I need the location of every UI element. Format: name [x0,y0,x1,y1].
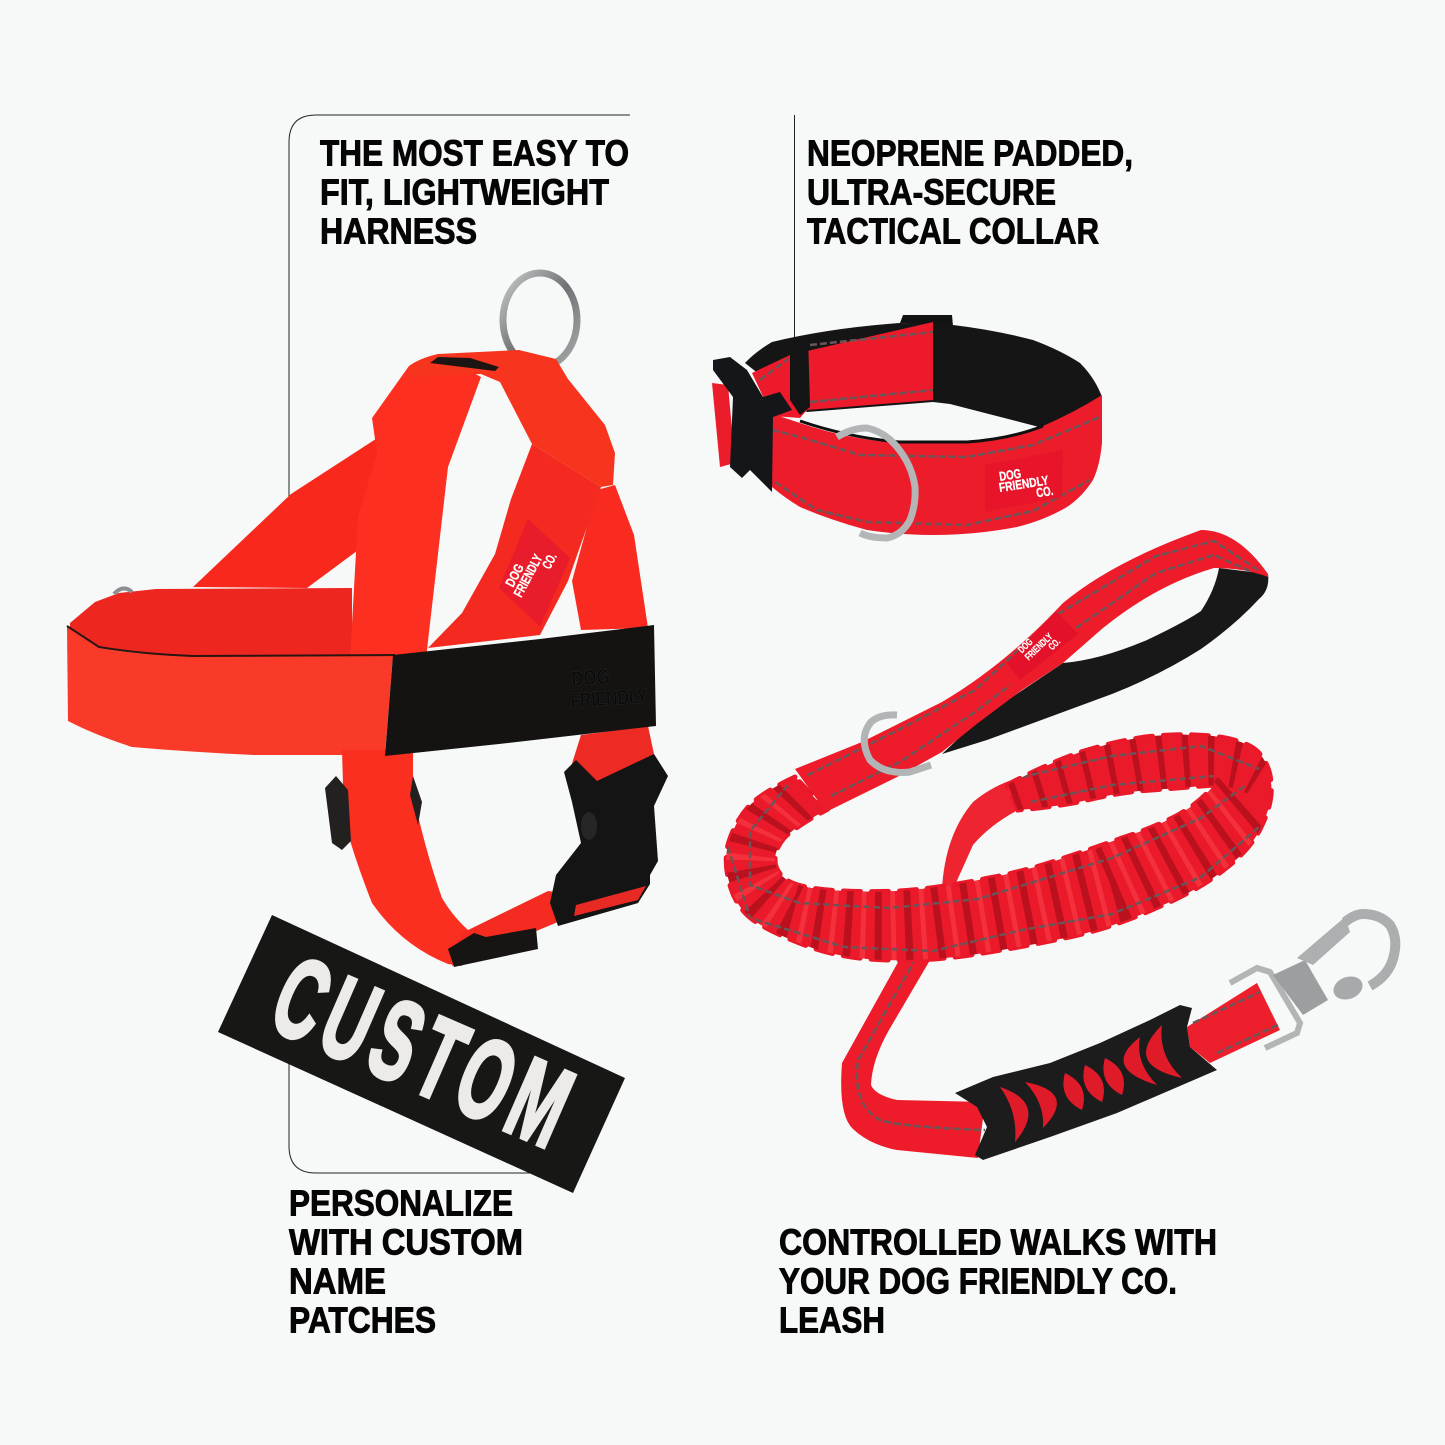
harness diagonal strap [452,878,650,966]
leash handle lining [942,568,1268,754]
collar label [985,450,1063,512]
leash swivel clip [1230,914,1395,1048]
heading: leash: YOUR DOG FRIENDLY CO. [779,1260,1177,1302]
collar buckle [713,357,792,492]
harness band inner side [70,588,352,660]
heading: collar: NEOPRENE PADDED, [807,132,1133,174]
collar D-ring [837,428,915,538]
collar black lining [745,323,1102,428]
harness left slider [325,776,422,850]
harness metal hardware [114,588,132,594]
leash D-ring [864,715,931,772]
harness yoke [409,350,615,487]
collar dark top edge [800,421,1043,442]
heading: custom patches: WITH CUSTOM [289,1222,523,1262]
collar label: DOG [998,466,1022,484]
collar black strap [790,335,810,415]
harness right front strap [428,444,601,648]
harness buckle strap slot [574,886,646,916]
leash handle [795,530,1268,812]
harness belly band [67,627,393,755]
harness panel on top [385,625,656,756]
collar stitching [772,417,1100,525]
harness left shoulder strap [193,433,385,588]
leash lower strap [841,955,985,1158]
collar label: CO. [1035,483,1054,500]
harness panel on top: DOG [571,665,610,691]
connector line: harness heading [289,115,630,500]
harness upper strap to buckle [570,726,654,783]
collar inner red side [752,322,933,418]
collar left end [712,383,735,467]
harness buckle pin [581,812,597,840]
patch text: CUSTOM [255,931,596,1175]
harness centre strap [350,354,481,660]
harness label: CO. [539,550,560,572]
heading: collar: ULTRA-SECURE [807,172,1056,212]
harness label: DOG [502,561,527,589]
harness panel on top: FRIENDLY [570,685,648,713]
bungee ribs [726,734,1272,960]
bungee scalloped edge [726,735,1271,960]
heading: leash: CONTROLLED WALKS WITH [779,1222,1217,1262]
harness label [499,519,570,627]
harness black yoke slot [430,357,499,371]
harness black buckle [550,754,668,926]
heading: custom patches: PATCHES [289,1300,436,1340]
connector line: patch heading [289,1050,530,1173]
collar [712,315,1102,538]
leash end strap [1187,983,1280,1063]
collar top keeper [900,315,953,326]
harness lower chest strap [342,750,474,966]
heading: leash [779,1222,1217,1340]
heading: collar: TACTICAL COLLAR [807,210,1099,252]
heading: harness [320,132,629,252]
leash handle label: CO. [1047,636,1063,653]
collar front band [770,395,1102,535]
heading: leash: LEASH [779,1300,885,1340]
heading: harness: THE MOST EASY TO [320,132,629,174]
heading: custom patches [289,1182,523,1340]
connector line: collar heading [794,115,796,345]
harness bottom slider [448,928,538,967]
leash handle label: FRIENDLY [1023,631,1055,663]
collar inner stitching [760,332,933,402]
leash grip cut-outs [1000,1025,1182,1142]
leash lower stitching [857,958,985,1130]
heading: harness: FIT, LIGHTWEIGHT [320,172,609,212]
harness [67,273,668,967]
heading: custom patches: NAME [289,1260,386,1302]
leash end stitching [1193,992,1278,1053]
leash bungee section [724,732,1274,962]
collar label: FRIENDLY [998,472,1050,495]
heading: custom patches: PERSONALIZE [289,1182,513,1224]
heading: harness: HARNESS [320,210,477,252]
leash handle stitching [808,541,1258,796]
custom name patch [218,915,625,1193]
heading: collar [807,132,1133,252]
leash handle label [1007,611,1078,680]
leash upper strap to bungee [942,781,1018,889]
leash [710,530,1395,1160]
leash handle label: DOG [1016,637,1036,656]
leash traffic grip [955,1005,1217,1160]
harness metal ring [503,273,577,367]
harness label: FRIENDLY [511,552,546,599]
harness band dark edge [67,626,395,656]
harness back right strap [572,485,648,630]
